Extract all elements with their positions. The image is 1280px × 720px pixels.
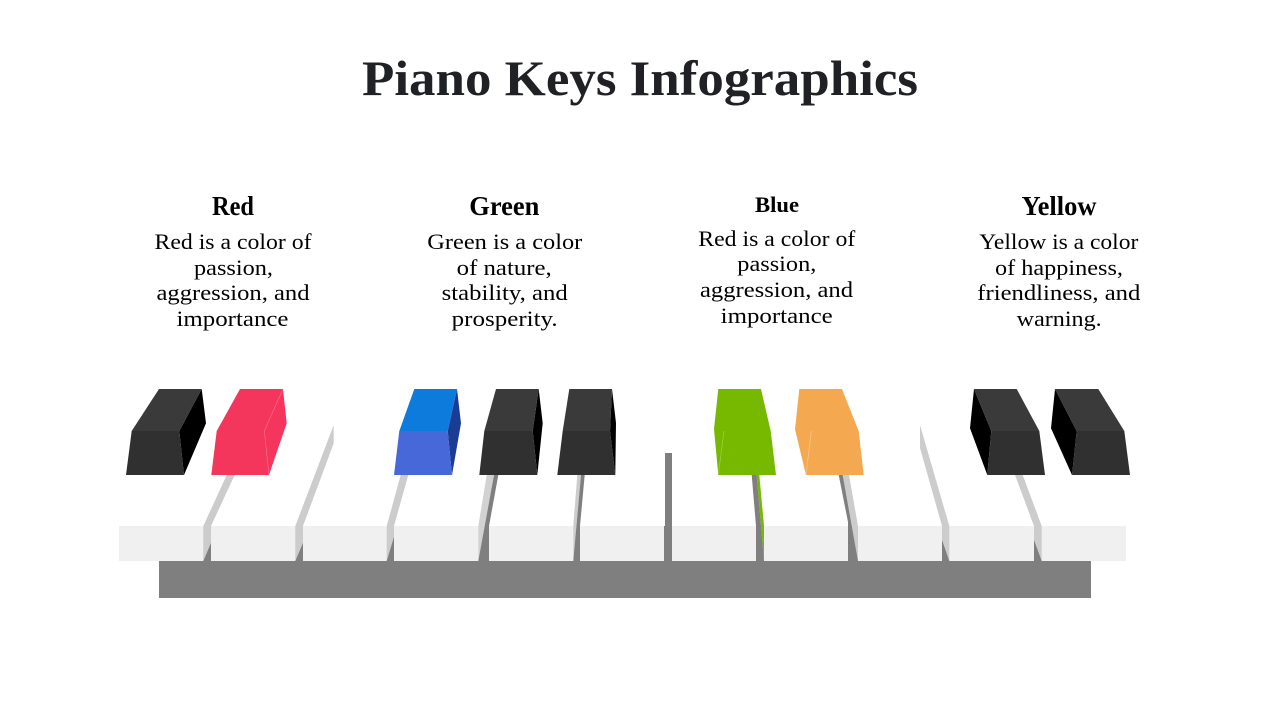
white key front band	[119, 526, 1126, 561]
description: Red: aggression, and	[156, 280, 310, 305]
title: Piano Keys Infographics	[362, 50, 918, 106]
description: Blue	[698, 226, 856, 328]
black key 5	[1051, 389, 1130, 475]
description: Green: prosperity.	[452, 306, 558, 331]
text block: Red	[154, 191, 312, 331]
black key 1	[126, 389, 206, 475]
text block: Blue	[698, 192, 856, 328]
piano keyboard	[119, 389, 1130, 598]
gap between white keys 6	[664, 453, 672, 561]
description: Yellow: Yellow is a color	[979, 229, 1139, 254]
gap between white keys 1	[203, 475, 235, 561]
gap between white keys 2	[295, 425, 334, 561]
orange key	[795, 389, 864, 475]
blue key	[394, 389, 461, 475]
description: Red	[154, 229, 312, 331]
black key 3	[557, 389, 616, 475]
heading: Blue: Blue	[755, 192, 799, 217]
description: Yellow: friendliness, and	[977, 280, 1140, 305]
heading: Yellow: Yellow	[1022, 191, 1097, 221]
heading: Green: Green	[469, 191, 539, 221]
gap between white keys 8	[839, 475, 858, 561]
description: Blue: aggression, and	[700, 277, 853, 302]
description: Blue: importance	[721, 303, 833, 328]
description: Green: Green is a color	[427, 229, 583, 254]
black key 2	[479, 389, 543, 475]
gap between white keys 9	[920, 425, 949, 561]
red key	[211, 389, 287, 475]
black key 4	[970, 389, 1045, 475]
description: Red: Red is a color of	[154, 229, 312, 254]
description: Yellow	[977, 229, 1140, 331]
description: Green: of nature,	[457, 255, 552, 280]
description: Blue: passion,	[737, 251, 816, 276]
description: Red: importance	[176, 306, 288, 331]
text block: Yellow	[977, 191, 1140, 331]
description: Blue: Red is a color of	[698, 226, 856, 251]
description: Green	[427, 229, 583, 331]
text block: Green	[427, 191, 583, 331]
description: Red: passion,	[194, 255, 273, 280]
description: Yellow: of happiness,	[995, 255, 1123, 280]
gap between white keys 5	[573, 475, 585, 561]
description: Yellow: warning.	[1017, 306, 1102, 331]
green key	[714, 389, 776, 475]
heading: Red: Red	[212, 191, 254, 221]
gap between white keys 10	[1015, 475, 1042, 561]
gap between white keys 4	[478, 475, 498, 561]
gap between white keys 3	[387, 475, 408, 561]
description: Green: stability, and	[442, 280, 568, 305]
gap between white keys 7	[752, 475, 764, 561]
keyboard base	[159, 561, 1091, 598]
